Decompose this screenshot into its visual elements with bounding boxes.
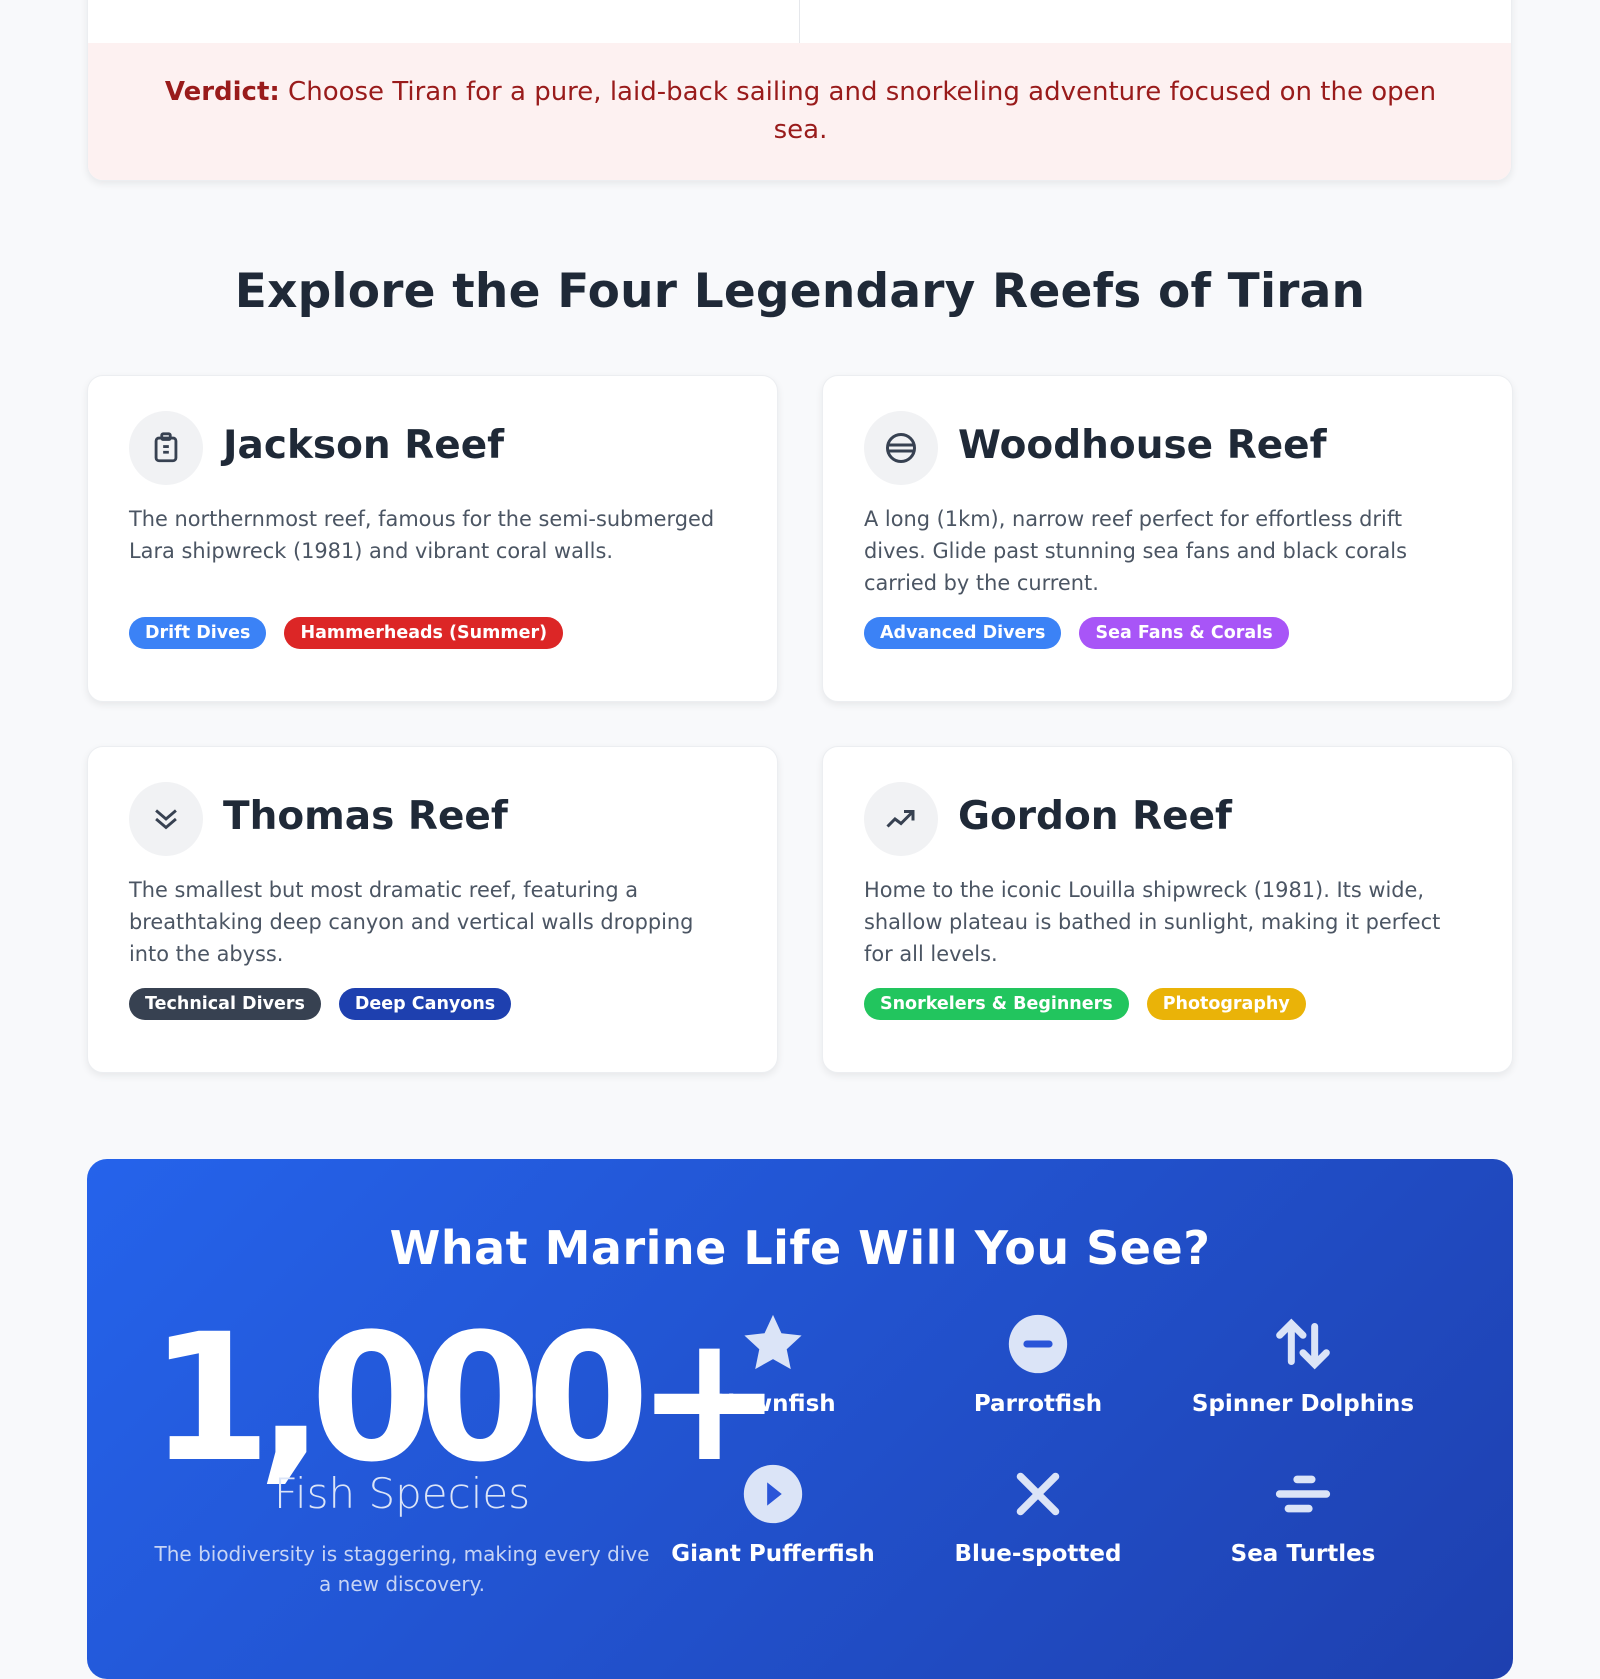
card: Thomas Reef [87,746,778,1073]
big stat: 1,000+ [149,1296,769,1501]
tags [129,617,563,649]
heading: What Marine Life Will You See? [390,1221,1210,1275]
verdict [88,43,1513,182]
species: Parrotfish [974,1314,1102,1417]
icon: clipboard [129,411,203,485]
species: Blue-spotted [955,1472,1121,1567]
title: Jackson Reef [223,423,504,468]
title: Gordon Reef [958,794,1232,839]
verdict: Verdict: Choose Tiran for a pure, laid-back sailing and snorkeling adventure focused on the open sea. [165,77,1436,145]
top comparison card with verdict [87,0,1512,181]
tags: Technical Divers [145,994,305,1014]
species: Parrotfish: Parrotfish [974,1391,1102,1417]
tags: Drift Dives [145,623,250,643]
section heading: Explore the Four Legendary Reefs of Tiran [235,264,1365,319]
species: Spinner Dolphins [1192,1318,1414,1417]
tags: Hammerheads (Summer) [300,623,547,643]
species: Spinner Dolphins: Spinner Dolphins [1192,1391,1414,1417]
description: A long (1km), narrow reef perfect for effortless drift dives. Glide past stunning sea fans and black corals carried by the current. [864,507,1407,595]
tags: Advanced Divers [880,623,1045,643]
tags [864,988,1306,1020]
species: Blue-spotted: Blue-spotted [955,1541,1121,1567]
card: Jackson Reef [87,375,778,702]
stat description: The biodiversity is staggering, making every dive a new discovery. [155,1542,649,1596]
species grid [671,1314,1414,1567]
card: Woodhouse Reef [822,375,1513,702]
tags: Photography [1163,994,1290,1014]
title: Thomas Reef [223,794,508,839]
species: Clownfish [710,1315,836,1417]
title: Woodhouse Reef [958,423,1327,468]
icon: double chevron [129,782,203,856]
description: Home to the iconic Louilla shipwreck (1981). Its wide, shallow plateau is bathed in sunlight, making it perfect for all levels. [864,878,1440,966]
description: The northernmost reef, famous for the semi-submerged Lara shipwreck (1981) and vibrant coral walls. [129,507,714,563]
tags: Deep Canyons [355,994,495,1014]
panel: marine life [87,1159,1513,1679]
description: The smallest but most dramatic reef, featuring a breathtaking deep canyon and vertical walls dropping into the abyss. [129,878,693,966]
tags [864,617,1289,649]
icon: striped circle [864,411,938,485]
icon: trend arrow [864,782,938,856]
stat label: Fish Species [274,1469,530,1518]
species: Giant Pufferfish [671,1464,875,1567]
species: Clownfish: Clownfish [710,1391,836,1417]
species: Sea Turtles [1231,1476,1375,1567]
species: Giant Pufferfish: Giant Pufferfish [671,1541,875,1567]
tags: Sea Fans & Corals [1095,623,1273,643]
tags: Snorkelers & Beginners [880,994,1113,1014]
species: Sea Turtles: Sea Turtles [1231,1541,1375,1567]
card: Gordon Reef [822,746,1513,1073]
tags [129,988,511,1020]
